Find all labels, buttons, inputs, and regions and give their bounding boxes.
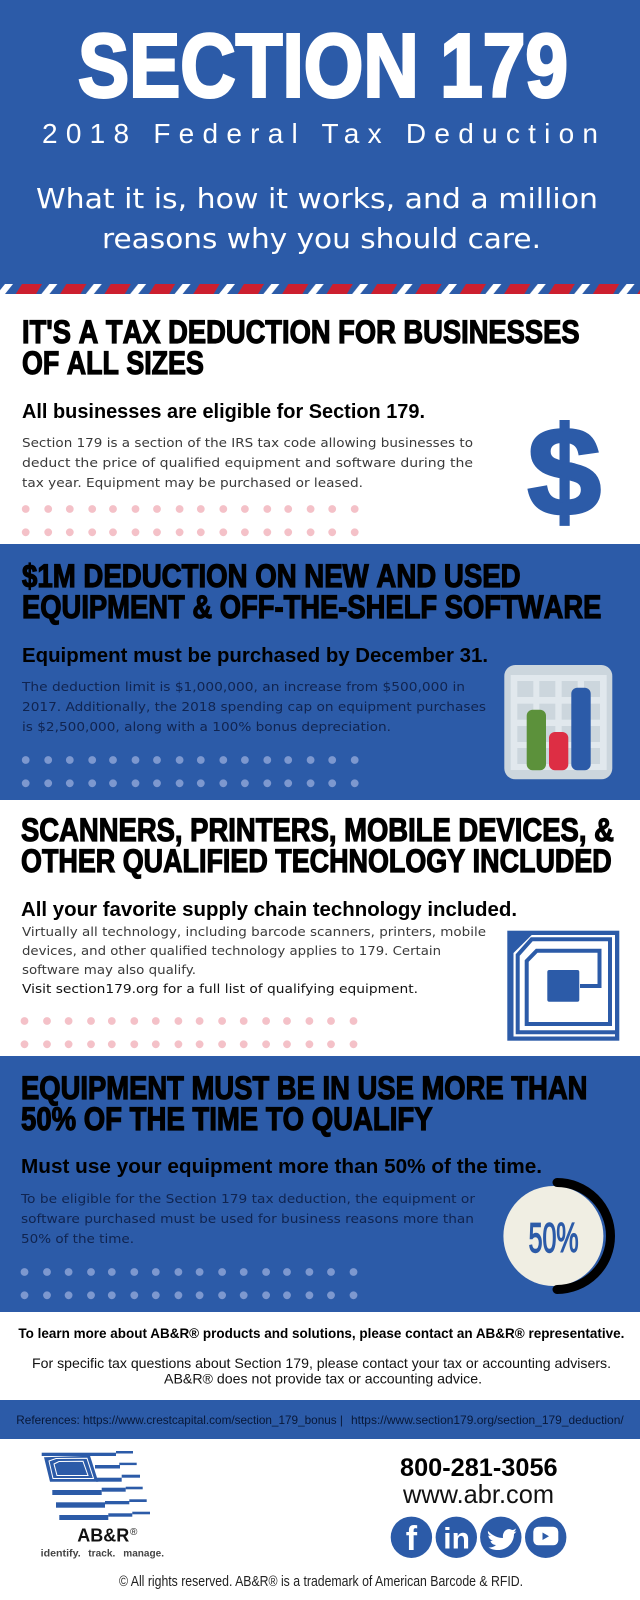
contact notes: AB&R® does not provide tax or accounting advice. [164,1370,482,1386]
dots [22,505,359,536]
tagline [36,183,598,255]
contact details: 800-281-3056 [400,1454,558,1482]
chart: 50% donut: 50% [529,1216,579,1262]
panel: qualified technology [21,813,619,1048]
body text: devices, and other qualified technology applies to 179. Certain [22,944,441,959]
AB&R logo: identify. [41,1548,81,1560]
AB&R logo: ® [130,1527,138,1538]
dots [21,1017,357,1048]
heading: 50% OF THE TIME TO QUALIFY [21,1102,433,1138]
heading: $1M DEDUCTION ON NEW AND USED [22,559,521,594]
references bar [0,1400,640,1439]
references bar: References: https://www.crestcapital.com/section_179_bonus | [16,1413,343,1427]
contact notes: To learn more about AB&R® products and solutions, please contact an AB&R® representative. [18,1325,624,1341]
icon: RFID chip [507,931,619,1041]
references bar: https://www.section179.org/section_179_deduction/ [351,1413,624,1427]
social icons [391,1517,566,1558]
icon: bar chart [504,665,612,779]
body text: is $2,500,000, along with a 100% bonus depreciation. [22,720,391,735]
airmail stripe divider [0,284,640,294]
body text: software purchased must be used for business reasons more than [21,1212,474,1227]
heading [22,559,601,626]
subheading: Equipment must be purchased by December 31. [22,645,488,667]
icon: twitter [480,1517,522,1558]
body text [22,925,486,997]
AB&R logo: manage. [123,1548,164,1560]
heading: OTHER QUALIFIED TECHNOLOGY INCLUDED [21,844,612,880]
body text: 2017. Additionally, the 2018 spending cap on equipment purchases [22,700,486,715]
body text: Virtually all technology, including barcode scanners, printers, mobile [22,925,486,940]
body text: Visit section179.org for a full list of qualifying equipment. [22,982,418,997]
icon: youtube [525,1517,566,1558]
heading [22,315,580,382]
subheading: All businesses are eligible for Section 179. [22,401,425,423]
body text: software may also qualify. [22,963,196,978]
body text: Section 179 is a section of the IRS tax code allowing businesses to [22,436,473,451]
tagline: What it is, how it works, and a million [36,183,598,215]
body text: To be eligible for the Section 179 tax deduction, the equipment or [20,1192,476,1207]
subtitle: 2018 Federal Tax Deduction [42,118,598,149]
panel: 50% use requirement [0,1056,640,1312]
copyright: © All rights reserved. AB&R® is a trademark of American Barcode & RFID. [119,1573,523,1590]
body text [20,1192,476,1247]
dots [21,1268,357,1299]
AB&R logo: AB&R [77,1526,129,1546]
AB&R logo [41,1451,164,1560]
panel: $1M deduction [0,544,640,800]
heading: IT'S A TAX DEDUCTION FOR BUSINESSES [22,315,580,351]
icon: dollar sign: $ [528,402,601,542]
subheading: Must use your equipment more than 50% of the time. [21,1156,542,1178]
contact details [400,1454,558,1509]
subheading: All your favorite supply chain technology included. [21,899,517,921]
contact notes [18,1325,624,1386]
icon: linkedin: in [443,1522,470,1556]
heading [21,1071,587,1138]
body text: 50% of the time. [21,1232,134,1247]
body text [21,680,486,735]
dots [22,756,359,787]
contact details: www.abr.com [402,1479,554,1509]
body text: tax year. Equipment may be purchased or leased. [22,476,363,491]
heading: EQUIPMENT MUST BE IN USE MORE THAN [21,1071,587,1107]
title: SECTION 179 [78,15,568,116]
tagline: reasons why you should care. [102,223,541,255]
icon: linkedin [436,1517,477,1558]
icon: facebook: f [406,1520,418,1558]
body text: The deduction limit is $1,000,000, an increase from $500,000 in [21,680,465,695]
panel: tax deduction for businesses [22,315,601,542]
AB&R logo: track. [88,1548,115,1560]
body text [22,436,473,491]
heading: OF ALL SIZES [22,346,204,382]
heading: SCANNERS, PRINTERS, MOBILE DEVICES, & [21,813,614,849]
chart: 50% donut [503,1182,610,1290]
contact notes: For specific tax questions about Section 179, please contact your tax or accounting advisers. [32,1355,611,1371]
body text: deduct the price of qualified equipment and software during the [22,456,473,471]
panel: header [0,0,640,284]
icon: facebook [391,1517,432,1558]
heading [21,813,614,880]
heading: EQUIPMENT & OFF-THE-SHELF SOFTWARE [22,590,601,626]
